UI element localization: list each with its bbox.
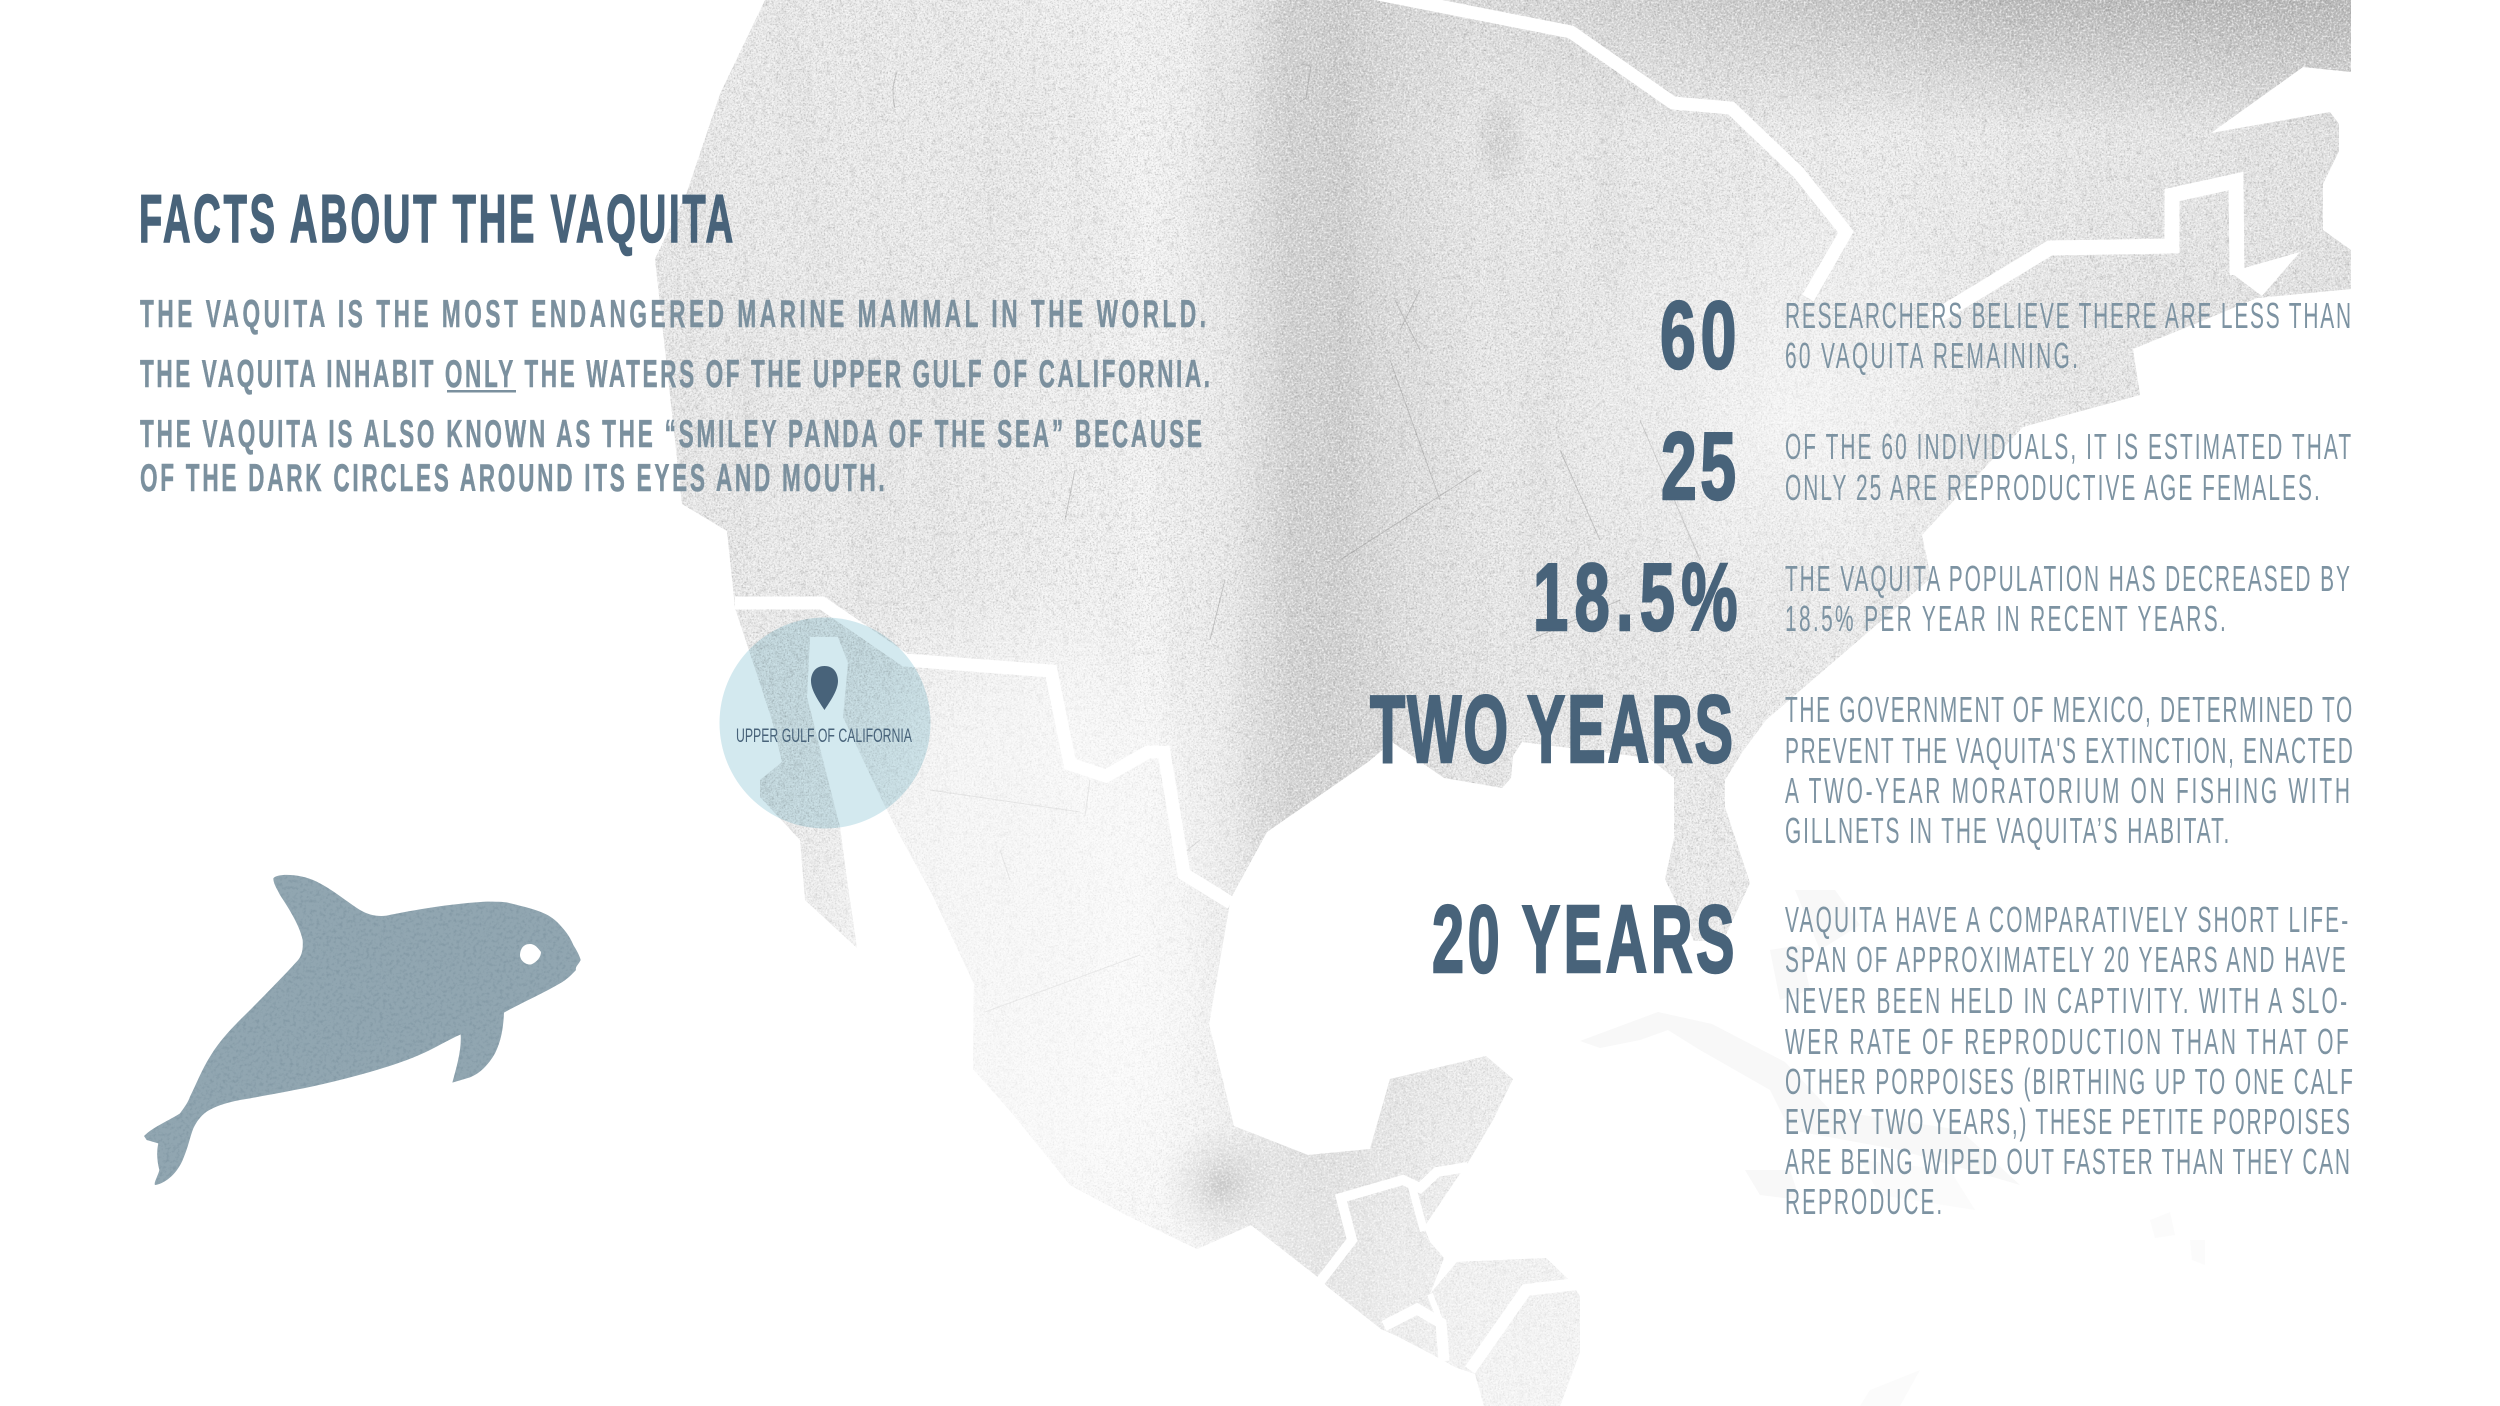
number 25: 25 (1661, 413, 1736, 520)
icon: location pin (811, 666, 838, 710)
text block: introduction (140, 292, 1210, 500)
description: OF THE 60 INDIVIDUALS, IT IS ESTIMATED THAT (1785, 427, 2351, 468)
intro paragraph three: OF THE DARK CIRCLES AROUND ITS EYES AND MOUTH. (140, 456, 885, 500)
description (1785, 690, 2353, 852)
callout: upper gulf of California (720, 618, 930, 828)
description: REPRODUCE. (1785, 1182, 1942, 1223)
description: 60 VAQUITA REMAINING. (1785, 336, 2078, 377)
fact: 25 females (1661, 413, 2351, 520)
description: ONLY 25 ARE REPRODUCTIVE AGE FEMALES. (1785, 468, 2320, 509)
description: SPAN OF APPROXIMATELY 20 YEARS AND HAVE (1785, 940, 2346, 981)
border: Canada and United States (1378, 0, 1846, 298)
icon: vaquita porpoise (144, 874, 581, 1185)
whale eye (520, 944, 541, 965)
number 20 years: 20 YEARS (1432, 885, 1734, 993)
description (1785, 559, 2350, 640)
map: North America textured landmass (640, 0, 2360, 1406)
intro line two: THE VAQUITA INHABIT ONLY THE WATERS OF THE UPPER GULF OF CALIFORNIA. (140, 352, 1210, 396)
description (1785, 296, 2351, 377)
description: 18.5% PER YEAR IN RECENT YEARS. (1785, 599, 2226, 640)
number 18.5%: 18.5% (1533, 544, 1738, 651)
description (1785, 427, 2351, 509)
underline under ONLY (447, 390, 516, 392)
description: ARE BEING WIPED OUT FASTER THAN THEY CAN (1785, 1142, 2350, 1183)
description: VAQUITA HAVE A COMPARATIVELY SHORT LIFE- (1785, 900, 2348, 941)
intro paragraph three: THE VAQUITA IS ALSO KNOWN AS THE “SMILEY PANDA OF THE SEA” BECAUSE (140, 412, 1202, 456)
number two years: TWO YEARS (1370, 675, 1733, 783)
title: FACTS ABOUT THE VAQUITA (139, 180, 733, 257)
border: Great Lakes and Maine (1931, 181, 2300, 320)
fact: 60 remaining (1660, 282, 2351, 389)
caribbean islands (1580, 890, 2205, 1406)
description: A TWO-YEAR MORATORIUM ON FISHING WITH (1785, 771, 2350, 812)
whale body (144, 874, 581, 1185)
description: OTHER PORPOISES (BIRTHING UP TO ONE CALF (1785, 1062, 2353, 1103)
description: EVERY TWO YEARS,) THESE PETITE PORPOISES (1785, 1102, 2350, 1143)
map texture (640, 0, 2360, 1406)
intro paragraph three (140, 412, 1202, 500)
border: United States and Mexico (735, 603, 1231, 903)
description: GILLNETS IN THE VAQUITA’S HABITAT. (1785, 811, 2229, 852)
description: RESEARCHERS BELIEVE THERE ARE LESS THAN (1785, 296, 2351, 337)
fact: two year moratorium (1370, 675, 2353, 852)
description: THE VAQUITA POPULATION HAS DECREASED BY (1785, 559, 2350, 600)
description: WER RATE OF REPRODUCTION THAN THAT OF (1785, 1022, 2349, 1063)
intro line one: THE VAQUITA IS THE MOST ENDANGERED MARINE MAMMAL IN THE WORLD. (140, 292, 1206, 336)
number 60: 60 (1660, 282, 1736, 389)
callout circle (720, 618, 930, 828)
fact: twenty year lifespan (1432, 885, 2353, 1223)
description (1785, 900, 2353, 1223)
description: THE GOVERNMENT OF MEXICO, DETERMINED TO (1785, 690, 2352, 731)
description: PREVENT THE VAQUITA'S EXTINCTION, ENACTED (1785, 731, 2353, 772)
description: NEVER BEEN HELD IN CAPTIVITY. WITH A SLO- (1785, 981, 2347, 1022)
callout label: UPPER GULF OF CALIFORNIA (736, 726, 912, 747)
borders: Central America (1319, 1167, 1585, 1370)
fact: 18.5% decline (1533, 544, 2350, 651)
